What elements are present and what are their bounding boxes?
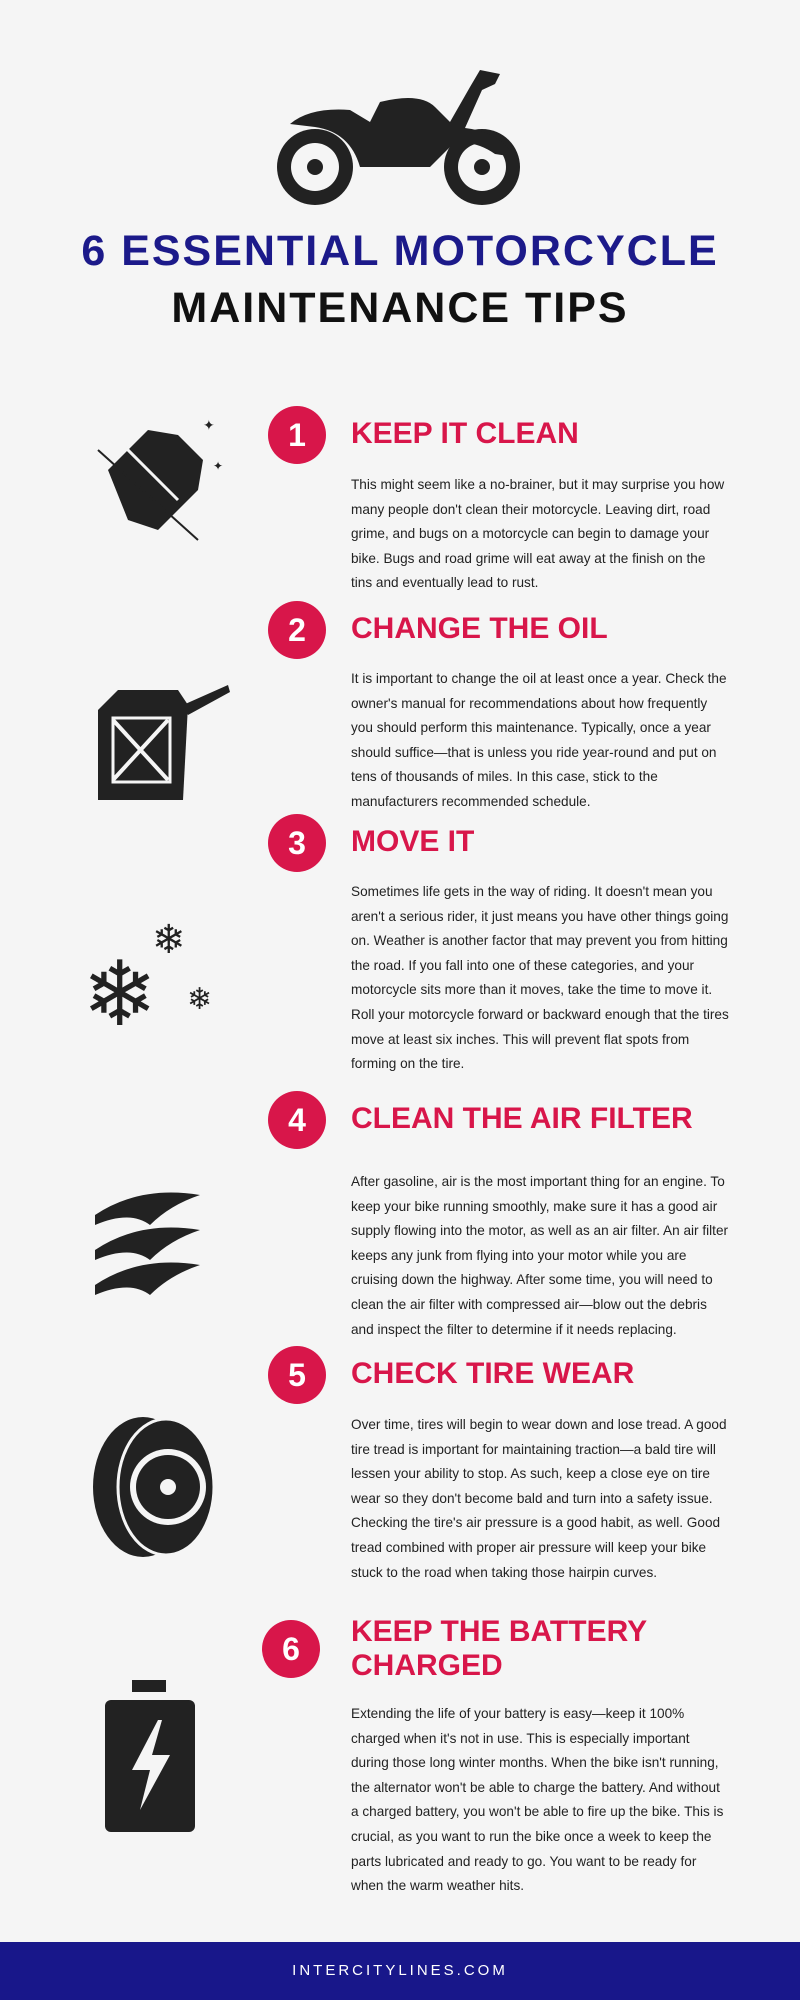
panel: tip 2 — [98, 601, 727, 809]
title: 6 ESSENTIAL MOTORCYCLE — [81, 227, 719, 275]
number 1: 1 — [288, 417, 306, 453]
heading: CHECK TIRE WEAR — [351, 1357, 634, 1390]
panel: tip 1 — [97, 406, 724, 590]
heading: CHARGED — [351, 1649, 503, 1682]
icon: snowflakes: ❄ — [82, 945, 157, 1045]
panel: tip 6 — [105, 1615, 723, 1893]
text: Over time, tires will begin to wear down and lose tread. A good tire tread is important for maintaining traction—a bald tire will lessen your ability to stop. As such, keep a close eye on tire wear so they don't become bald and turn into a safety issue. Checking the tire's air pressure is a good habit, as well. Good tread combined with proper air pressure will keep your bike stuck to the road when taking those hairpin curves. — [351, 1417, 727, 1580]
panel: tip 3 — [82, 814, 729, 1071]
number 3: 3 — [288, 825, 306, 861]
icon: snowflakes: ❄ — [152, 918, 186, 962]
text: Extending the life of your battery is easy—keep it 100% charged when it's not in use. This is especially important during those long winter months. When the bike isn't running, the alternator won't be able to charge the battery. And without a charged battery, you won't be able to fire up the bike. This is crucial, as you want to run the bike once a week to keep the parts lubricated and ready to go. You want to be ready for when the warm weather hits. — [351, 1706, 723, 1893]
number 4 — [268, 1091, 326, 1149]
icon: snowflakes — [82, 918, 212, 1045]
number 4: 4 — [288, 1102, 306, 1138]
heading — [351, 1615, 647, 1682]
icon: snowflakes: ❄ — [187, 983, 212, 1016]
number 5 — [268, 1346, 326, 1404]
icon: cleaning glove: ✦ — [203, 417, 215, 433]
subtitle: MAINTENANCE TIPS — [171, 284, 629, 332]
text: After gasoline, air is the most important thing for an engine. To keep your bike running smoothly, make sure it has a good air supply flowing into the motor, as well as an air filter. An air filter keeps any junk from flying into your motor while you are cruising down the highway. After some time, you will need to clean the air filter with compressed air—blow out the debris and inspect the filter to determine if it needs replacing. — [351, 1174, 728, 1337]
icon: motorcycle — [277, 70, 520, 205]
icon: oil can — [98, 685, 230, 800]
icon: cleaning glove: ✦ — [213, 459, 223, 473]
panel: tip 5 — [93, 1346, 727, 1580]
icon: tire — [93, 1417, 212, 1557]
number 2: 2 — [288, 612, 306, 648]
heading: KEEP THE BATTERY — [351, 1615, 647, 1648]
heading: CLEAN THE AIR FILTER — [351, 1102, 693, 1135]
icon: cleaning glove — [97, 417, 223, 541]
number 2 — [268, 601, 326, 659]
number 6: 6 — [282, 1631, 300, 1667]
text: Sometimes life gets in the way of riding. It doesn't mean you aren't a serious rider, it just means you have other things going on. Weather is another factor that may prevent you from hitting the road. If you fall into one of these categories, and your motorcycle sits more than it moves, take the time to move it. Roll your motorcycle forward or backward enough that the tires move at least six inches. This will prevent flat spots from forming on the tire. — [351, 884, 729, 1071]
footer: INTERCITYLINES.COM — [292, 1962, 508, 1979]
text: It is important to change the oil at least once a year. Check the owner's manual for recommendations about how frequently you should perform this maintenance. Typically, once a year should suffice—that is unless you ride year-round and put on tens of thousands of miles. In this case, stick to the manufacturers recommended schedule. — [351, 671, 727, 809]
number 1 — [268, 406, 326, 464]
panel: tip 4 — [95, 1091, 728, 1337]
icon: air waves — [95, 1192, 200, 1295]
icon: battery — [105, 1680, 195, 1832]
text: This might seem like a no-brainer, but it may surprise you how many people don't clean their motorcycle. Leaving dirt, road grime, and bugs on a motorcycle can begin to damage your bike. Bugs and road grime will eat away at the finish on the tins and eventually lead to rust. — [351, 477, 724, 590]
heading: CHANGE THE OIL — [351, 612, 608, 645]
heading: MOVE IT — [351, 825, 474, 858]
footer — [0, 1942, 800, 2000]
number 6 — [262, 1620, 320, 1678]
heading: KEEP IT CLEAN — [351, 417, 579, 450]
number 5: 5 — [288, 1357, 306, 1393]
number 3 — [268, 814, 326, 872]
